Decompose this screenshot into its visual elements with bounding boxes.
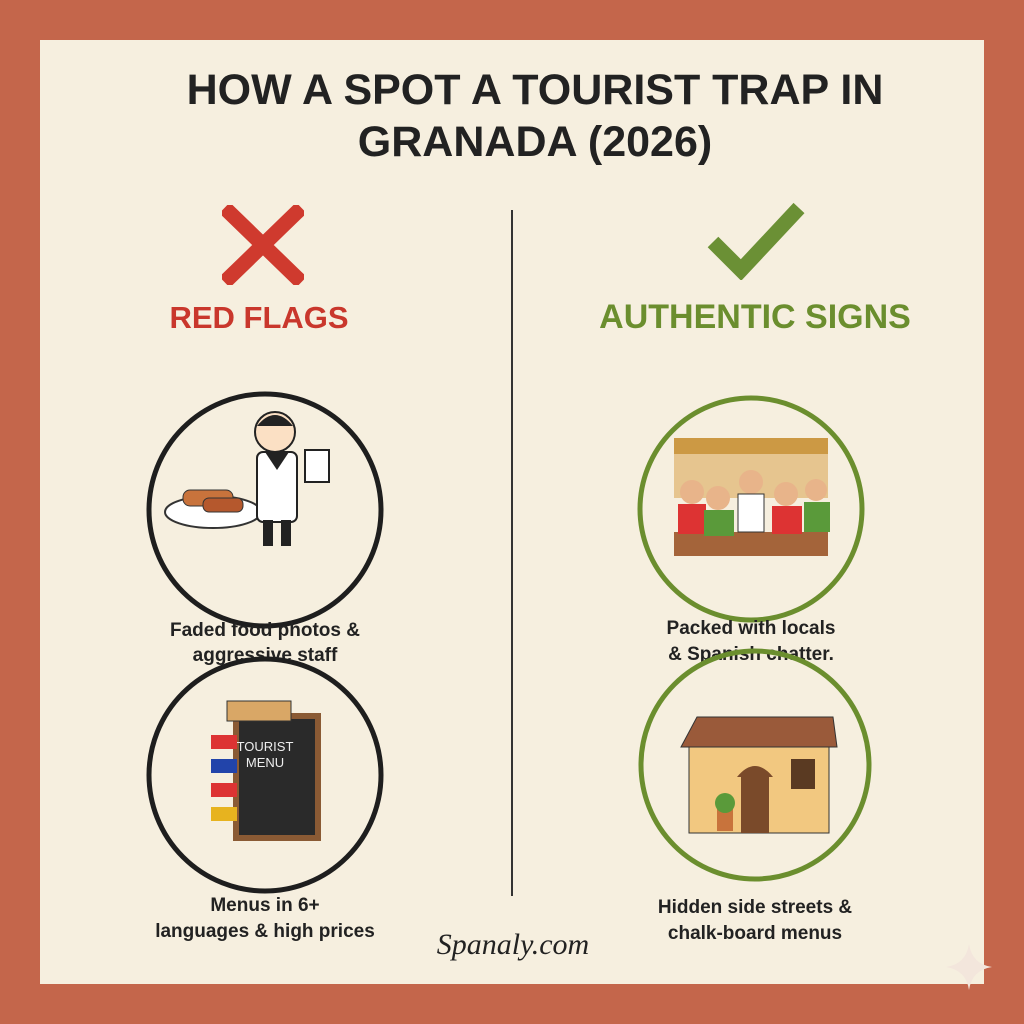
- icon: small house: [638, 648, 872, 882]
- divider: [511, 210, 513, 896]
- panel: faded food photos: [146, 392, 384, 666]
- icon: tourist menu board: MENU: [246, 755, 284, 770]
- panel: packed with locals: [638, 396, 864, 665]
- panel: hidden side streets: [638, 648, 872, 944]
- caption: Faded food photos &: [170, 620, 360, 641]
- panel: multilingual menus: [146, 656, 384, 942]
- caption: aggressive staff: [193, 645, 337, 666]
- title: [187, 66, 883, 166]
- caption: [658, 897, 852, 944]
- caption: Hidden side streets &: [658, 897, 852, 918]
- caption: [170, 620, 360, 666]
- brand: Spanaly.com: Spanaly.com: [437, 928, 589, 961]
- heading: red flags: RED FLAGS: [169, 300, 349, 335]
- caption: [155, 895, 375, 942]
- title: HOW A SPOT A TOURIST TRAP IN: [187, 66, 883, 114]
- caption: languages & high prices: [155, 921, 375, 942]
- icon: tourist menu board: [146, 656, 384, 894]
- caption: Menus in 6+: [210, 895, 320, 916]
- caption: & Spanish chatter.: [668, 644, 834, 665]
- caption: chalk-board menus: [668, 923, 842, 944]
- icon: food plate and waiter: [146, 392, 384, 628]
- caption: Packed with locals: [667, 618, 835, 639]
- icon: busy bar with locals: [638, 396, 864, 622]
- icon: red X: [222, 205, 304, 285]
- icon: green check: [708, 202, 804, 280]
- icon: sparkle: [948, 946, 992, 990]
- title: GRANADA (2026): [358, 118, 712, 166]
- heading: authentic signs: AUTHENTIC SIGNS: [599, 298, 911, 336]
- caption: [667, 618, 835, 665]
- icon: tourist menu board: TOURIST: [237, 739, 293, 754]
